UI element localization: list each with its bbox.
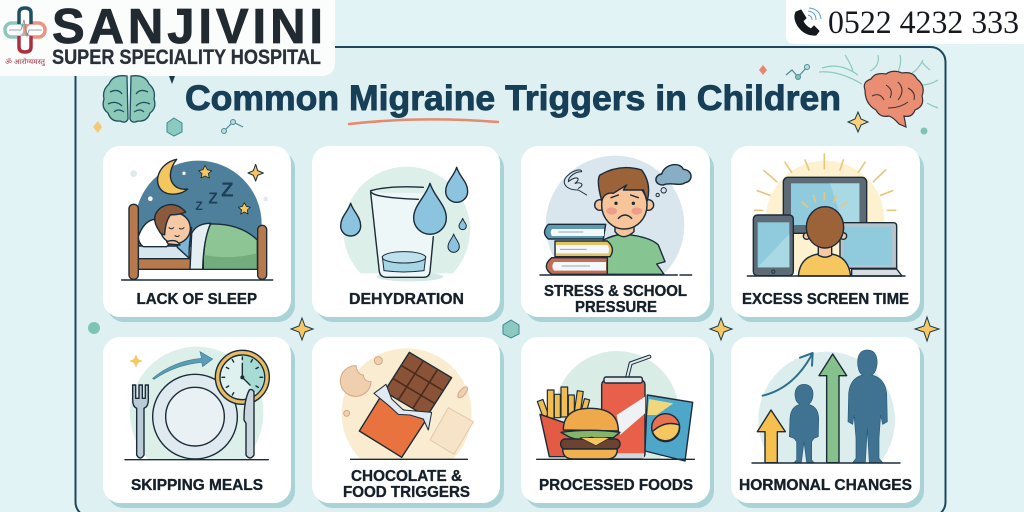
- illustration: plate and clock: [124, 346, 270, 460]
- illustration: chocolate bar: [340, 348, 474, 460]
- label: stress and school pressure: [544, 283, 687, 316]
- card: hormonal changes: [731, 337, 924, 508]
- illustration: sleeping child: [122, 159, 273, 287]
- illustration: growth arrows and silhouettes: [751, 350, 901, 464]
- label: stress and school pressure: STRESS & SCHOOL: [544, 283, 687, 300]
- illustration: sleeping child: Z: [221, 179, 234, 202]
- illustration: sleeping child: Z: [208, 190, 218, 207]
- icon: coral brain with nerves: [819, 55, 938, 127]
- title: Common Migraine Triggers in Children: [185, 79, 841, 118]
- label: chocolate and food triggers: [343, 468, 470, 501]
- icon: phone: [795, 8, 821, 35]
- label: chocolate and food triggers: CHOCOLATE &: [351, 468, 462, 485]
- illustration: fast food: [536, 351, 695, 462]
- logo name: SANJIVINI: [52, 0, 323, 54]
- label: hormonal changes: HORMONAL CHANGES: [739, 477, 912, 494]
- label: processed foods: PROCESSED FOODS: [539, 477, 693, 494]
- label: stress and school pressure: PRESSURE: [575, 299, 657, 316]
- label: excess screen time: EXCESS SCREEN TIME: [742, 291, 909, 308]
- phone number: 0522 4232 333: [828, 5, 1019, 41]
- illustration: stressed child with books: [539, 156, 692, 276]
- illustration: child in front of screens: [747, 154, 905, 279]
- label: skipping meals: SKIPPING MEALS: [131, 477, 263, 494]
- phone block: [786, 0, 1024, 44]
- illustration: glass and drops: [341, 167, 470, 293]
- illustration: sleeping child: Z: [195, 199, 203, 213]
- logo cross icon: [5, 8, 45, 52]
- label: chocolate and food triggers: FOOD TRIGGERS: [343, 484, 470, 501]
- title underline: [349, 119, 498, 124]
- icon: teal brain: [103, 76, 155, 122]
- logo subtitle: SUPER SPECIALITY HOSPITAL: [52, 46, 321, 69]
- card: excess screen time: [731, 146, 924, 322]
- card: lack of sleep: [103, 146, 295, 322]
- card: skipping meals: [103, 337, 295, 508]
- card: chocolate and food triggers: [312, 337, 504, 508]
- hospital logo block: [0, 0, 335, 76]
- main panel: [76, 47, 946, 512]
- card: stress and school pressure: [521, 146, 714, 322]
- label: lack of sleep: LACK OF SLEEP: [136, 291, 257, 308]
- logo tagline: ॐ आरोग्यमस्तु: [5, 57, 46, 66]
- card: processed foods: [521, 337, 714, 508]
- card: dehydration: [312, 146, 504, 322]
- label: dehydration: DEHYDRATION: [349, 291, 464, 308]
- decorative molecule and sparkle icons: [88, 64, 939, 341]
